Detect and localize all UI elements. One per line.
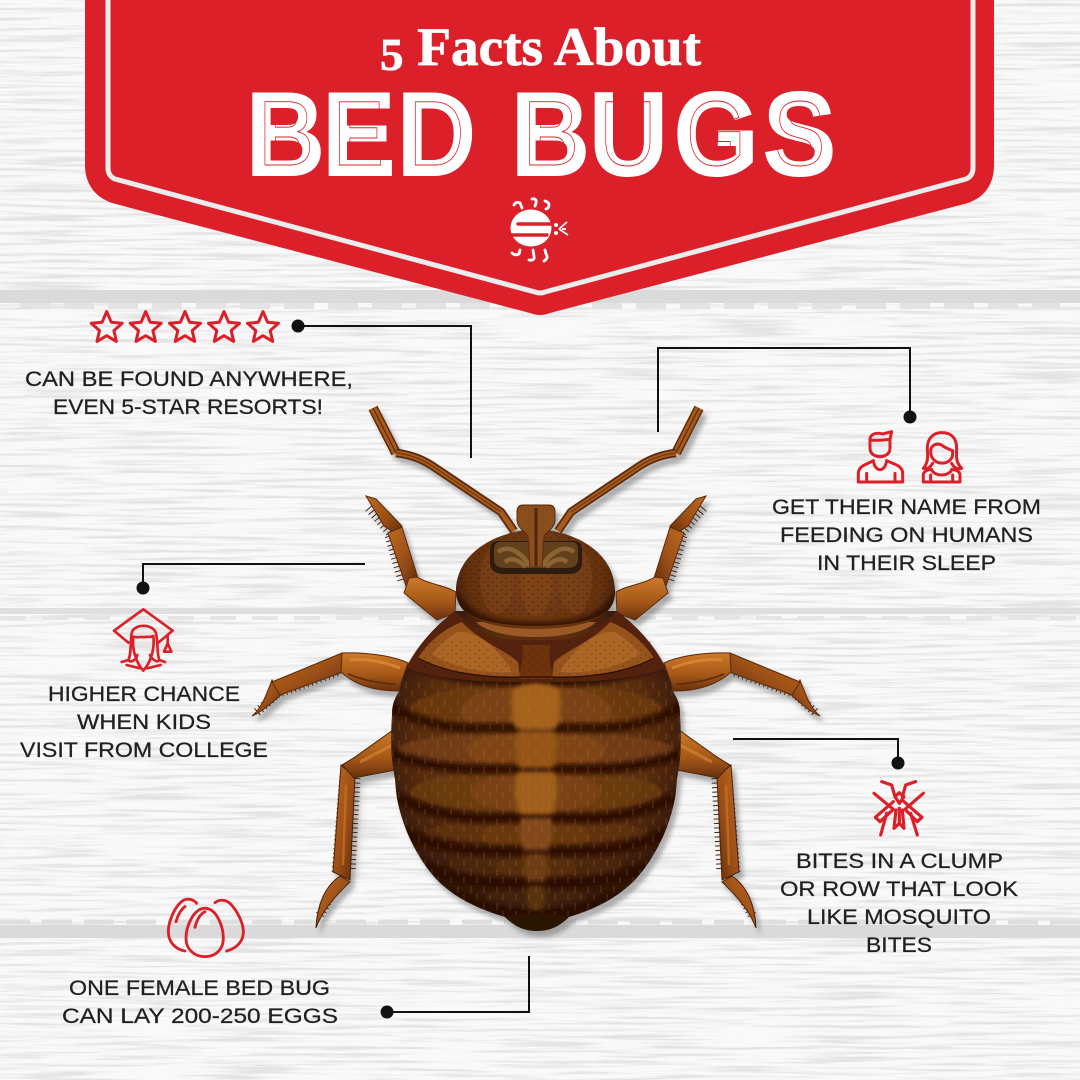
text: higher chance [20, 683, 268, 762]
prothorax [456, 505, 616, 630]
leader line: college [136, 564, 365, 594]
left legs and antenna [252, 408, 514, 928]
thorax wing pads [406, 611, 666, 682]
right legs and antenna [558, 408, 820, 928]
text: can be found anywhere [25, 368, 353, 419]
text: higher chance: WHEN KIDS [77, 711, 211, 734]
abdomen [385, 600, 685, 940]
text: one female bed bug: ONE FEMALE BED BUG [69, 977, 330, 1000]
text: bites in a clump [780, 850, 1018, 957]
leader line: five-star resorts [292, 320, 471, 458]
text: bites in a clump: BITES IN A CLUMP [796, 850, 1003, 873]
bed bug illustration [252, 408, 820, 940]
icon: man and woman [858, 432, 962, 482]
logo: bed bug icon [510, 199, 568, 261]
text: bites in a clump: BITES [866, 934, 932, 957]
title: 5 Facts About: 5 [380, 29, 404, 80]
leader line: feeding on humans [658, 348, 916, 432]
fact: five-star resorts [25, 312, 353, 419]
title: BED BUGS: BED BUGS [247, 68, 835, 199]
text: higher chance: VISIT FROM COLLEGE [20, 739, 268, 762]
text: get their name: GET THEIR NAME FROM [772, 496, 1041, 519]
leader line: bites [733, 739, 904, 770]
text: get their name: FEEDING ON HUMANS [780, 524, 1033, 547]
text: can be found anywhere: EVEN 5-STAR RESORTS! [53, 396, 323, 419]
fact: mosquito bites [780, 782, 1018, 957]
icon: three eggs [168, 899, 243, 957]
icon: mosquito [874, 782, 923, 835]
icon: five stars [91, 312, 278, 341]
text: bites in a clump: LIKE MOSQUITO [807, 906, 991, 929]
title: 5 Facts About: Facts About [404, 17, 701, 77]
text: can be found anywhere: CAN BE FOUND ANYWHERE, [25, 368, 353, 391]
title: BED BUGS: BED BUGS [260, 82, 824, 185]
text: one female bed bug [62, 977, 338, 1028]
leader line: eggs [380, 956, 529, 1018]
text: bites in a clump: OR ROW THAT LOOK [780, 878, 1018, 901]
icon: graduate [114, 609, 173, 671]
text: get their name [772, 496, 1041, 575]
fact: kids from college [20, 609, 268, 762]
fact: feeding on humans [772, 432, 1041, 575]
fact: eggs [62, 899, 338, 1028]
head plate [490, 541, 582, 574]
text: one female bed bug: CAN LAY 200-250 EGGS [62, 1005, 338, 1028]
head tip [517, 505, 555, 567]
text: higher chance: HIGHER CHANCE [48, 683, 240, 706]
header banner [85, 0, 994, 315]
text: get their name: IN THEIR SLEEP [817, 552, 996, 575]
